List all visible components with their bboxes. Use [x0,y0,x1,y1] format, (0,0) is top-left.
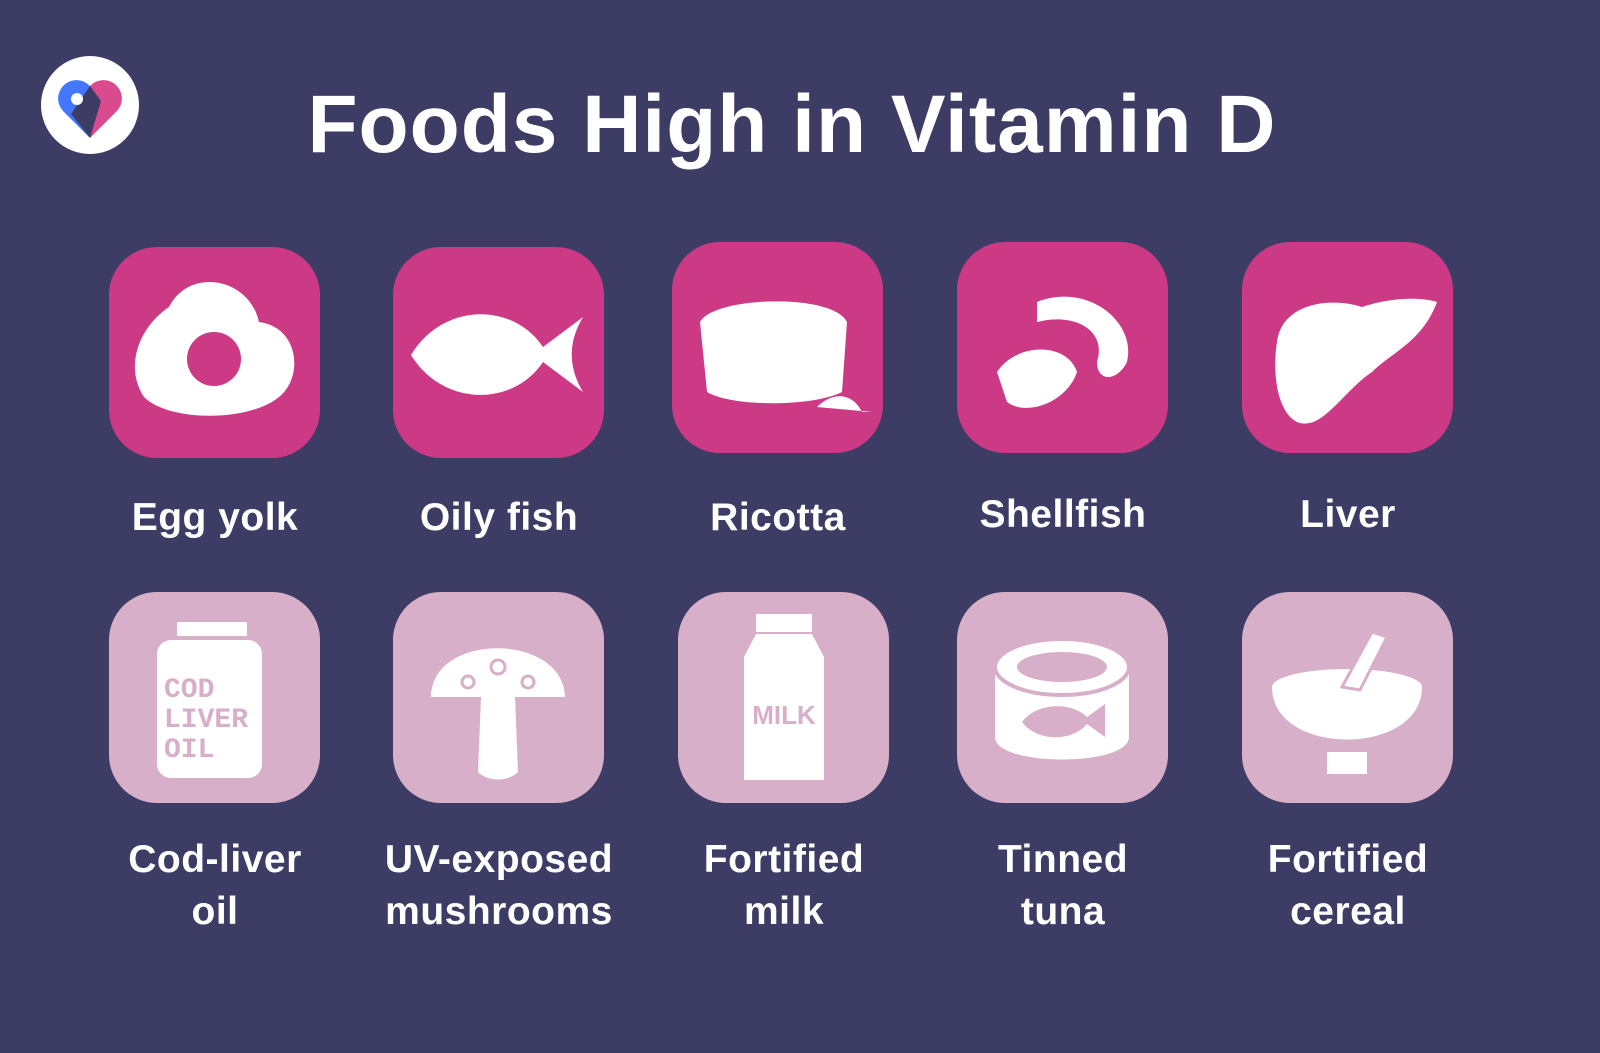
tile: cod-liver oil: OIL [164,735,214,766]
tile: fortified milk [678,592,889,803]
label: tinned tuna [998,838,1128,933]
label: mushrooms: UV-exposed [385,838,613,881]
label: mushrooms: mushrooms [385,890,613,933]
tile: cod-liver oil [109,592,320,803]
label: oily fish: Oily fish [420,496,578,539]
label: tinned tuna: tuna [1021,890,1105,933]
tile: tinned tuna [957,592,1168,803]
label: fortified milk: milk [744,890,824,933]
logo [41,56,139,154]
label: tinned tuna: Tinned [998,838,1128,881]
tile: mushrooms [393,592,604,803]
title: Foods High in Vitamin D [307,79,1277,170]
label: cod-liver oil [128,838,302,933]
tile: fortified cereal [1242,592,1453,803]
label: fortified milk [704,838,864,933]
label: mushrooms [385,838,613,933]
label: egg yolk: Egg yolk [132,496,298,539]
label: fortified milk: Fortified [704,838,864,881]
label: liver: Liver [1300,493,1396,536]
label: fortified cereal: Fortified [1268,838,1428,881]
label: fortified cereal: cereal [1290,890,1406,933]
label: shellfish: Shellfish [979,493,1147,536]
tile: egg yolk [109,247,320,458]
tile: shellfish [957,242,1168,453]
tile: cod-liver oil: COD [164,675,214,706]
tile: oily fish [393,247,604,458]
label: ricotta: Ricotta [710,496,846,539]
tile: ricotta [672,242,883,453]
label: fortified cereal [1268,838,1428,933]
label: cod-liver oil: oil [192,890,238,933]
tile: cod-liver oil: LIVER [164,705,248,736]
tile: liver [1242,242,1453,453]
tile: fortified milk: MILK [752,700,816,730]
label: cod-liver oil: Cod-liver [128,838,302,881]
